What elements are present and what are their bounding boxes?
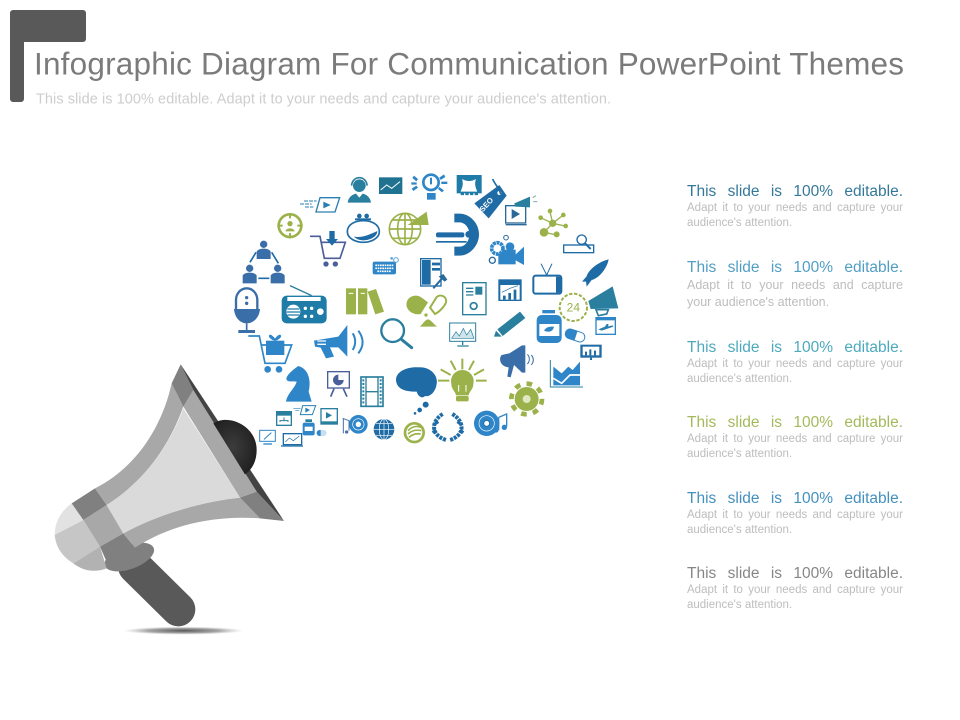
icon: org chart window: [276, 411, 292, 426]
icon: capsule: [564, 328, 586, 343]
icon: plane window: [596, 318, 615, 334]
icon: small video: [321, 409, 337, 424]
heading 4: This slide is 100% editable.: [687, 414, 903, 431]
icon: laurel wreath: [433, 414, 463, 440]
icon: film with speed lines: [300, 198, 340, 212]
body 3: Adapt it to your needs and capture your audience's attention.: [687, 358, 903, 384]
heading 2: This slide is 100% editable.: [687, 259, 903, 276]
heading 3: This slide is 100% editable.: [687, 339, 903, 356]
icon: television: [533, 264, 561, 294]
icon: cart with gift: [248, 336, 292, 373]
icon: small laptop: [281, 434, 303, 446]
icon: molecule network: [539, 209, 567, 237]
icon: pencil: [494, 312, 525, 337]
icon: presentation board: [328, 372, 349, 397]
icon: green hill: [419, 313, 437, 327]
body 4: Adapt it to your needs and capture your audience's attention.: [687, 433, 903, 460]
heading 1: This slide is 100% editable.: [687, 183, 903, 200]
speaker dome: [213, 420, 257, 474]
icon: keyboard: [373, 257, 398, 274]
icon: coin purse: [347, 214, 379, 242]
icon: chart window: [498, 279, 522, 301]
body 1: Adapt it to your needs and capture your audience's attention.: [687, 202, 903, 228]
icon: gears and camera: [489, 235, 524, 265]
icon: disc and notes: [474, 411, 507, 436]
icon: area chart: [550, 360, 583, 387]
icon: headset agent: [348, 178, 371, 203]
text block 2: [687, 259, 903, 308]
text block 3: [687, 339, 903, 384]
icon: small bottle: [303, 419, 315, 435]
icon: microphone: [234, 288, 260, 333]
icon: chess knight: [286, 366, 312, 402]
text block 6: [687, 565, 903, 610]
title: Infographic Diagram For Communication PowerPoint Themes: [34, 46, 904, 82]
megaphone: [55, 364, 284, 635]
text block 1: [687, 183, 903, 228]
icon: team network: [243, 241, 285, 283]
icon: slate megaphone: [500, 345, 533, 377]
icon: light bulb idea: [411, 174, 447, 200]
icon: medicine bottle: [537, 310, 562, 343]
icon: report page: [463, 283, 486, 315]
icon: green gear: [511, 384, 542, 414]
icon: small pill: [317, 430, 327, 436]
icon: video with megaphone: [506, 196, 537, 225]
icon: blue megaphone: [314, 325, 363, 358]
text block 4: [687, 414, 903, 460]
horn bands: [95, 364, 284, 548]
icon: chart board: [379, 177, 402, 194]
icon: search bar: [564, 235, 594, 253]
icon: teal megaphone: [588, 286, 618, 316]
icon: green books: [346, 288, 384, 314]
title bracket: [10, 10, 86, 102]
body 6: Adapt it to your needs and capture your audience's attention.: [687, 584, 903, 610]
horn rear rim: [181, 364, 284, 521]
icon: green bulb: [438, 359, 487, 401]
heading 6: This slide is 100% editable.: [687, 565, 903, 582]
icon: shopping cart download: [310, 231, 345, 267]
icon: small chart monitor: [580, 345, 602, 360]
body 2: Adapt it to your needs and capture your audience's attention.: [687, 278, 903, 308]
icon: target person: [277, 213, 303, 238]
megaphone handle: [135, 567, 178, 609]
megaphone collar: [101, 537, 158, 577]
icon: globe with plane: [374, 419, 394, 440]
mouthpiece cap: [55, 488, 135, 571]
icon: globe with megaphone: [389, 212, 429, 245]
icon: 24 hour clock: 24: [567, 301, 580, 315]
icon: SEO tag: [474, 179, 507, 218]
icon: document with hammer: [421, 259, 447, 288]
subtitle: This slide is 100% editable. Adapt it to your needs and capture your audience's attention.: [36, 92, 611, 108]
icon: rocket: [582, 259, 609, 287]
icon: small film: [293, 406, 316, 415]
heading 5: This slide is 100% editable.: [687, 490, 903, 507]
icon: 24 hour clock: [560, 294, 587, 321]
text block 5: [687, 490, 903, 536]
icon: music disc left: [343, 415, 368, 434]
icon: brain with thought bubbles: [396, 367, 437, 415]
icon: monitor line chart: [450, 323, 476, 346]
icon: green disc: [405, 423, 424, 442]
icon: film strip: [361, 377, 383, 406]
body 5: Adapt it to your needs and capture your audience's attention.: [687, 509, 903, 536]
icon: scanner machine: [436, 214, 479, 256]
icon: magnifier: [381, 319, 412, 348]
icon cloud: [234, 174, 618, 446]
icon: stage curtains: [457, 175, 482, 194]
megaphone shadow: [123, 627, 243, 635]
icon: small monitor: [260, 430, 275, 444]
icon: radio: [282, 286, 327, 323]
icon: pill capsule: [406, 296, 446, 314]
icon: SEO tag: SEO: [478, 196, 495, 214]
